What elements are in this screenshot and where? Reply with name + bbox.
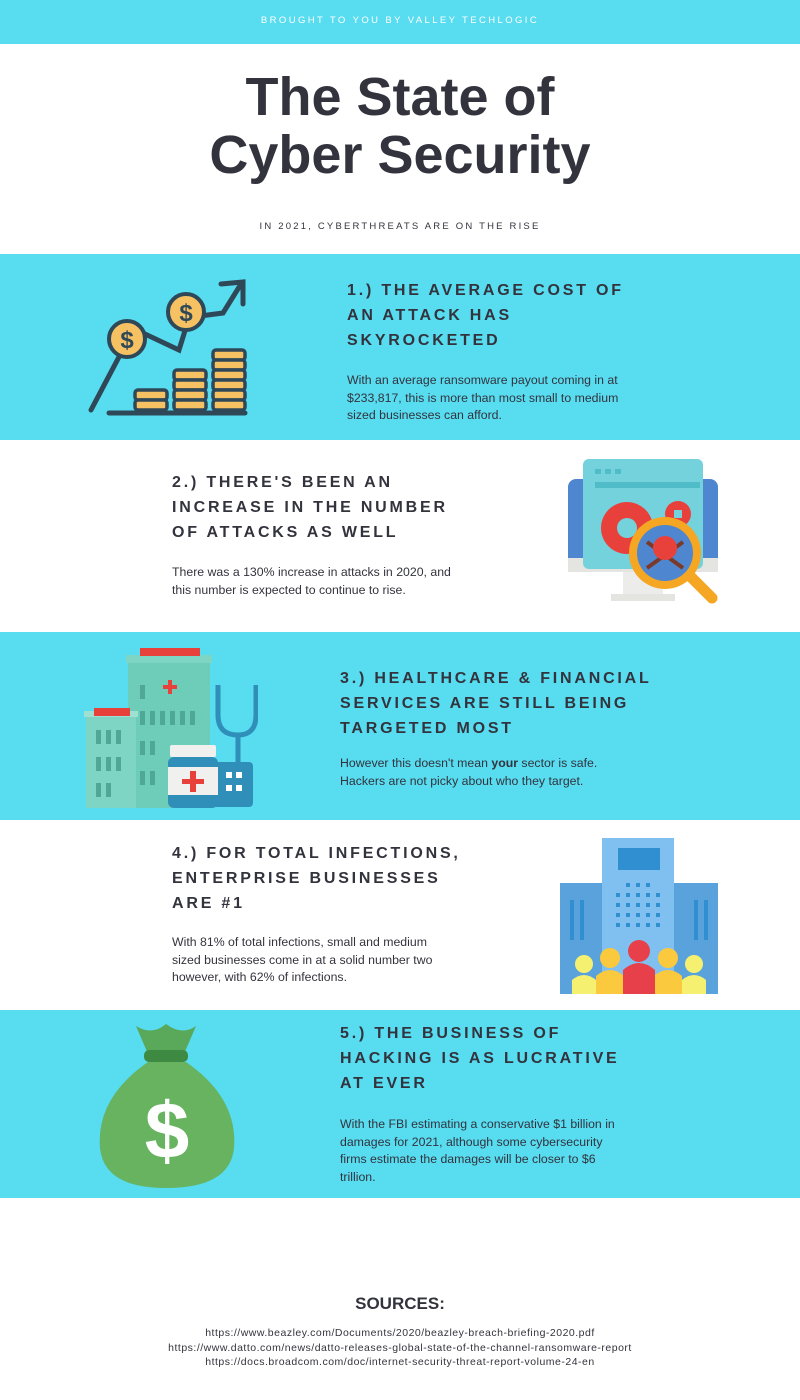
heading 1: AN ATTACK HAS (347, 307, 512, 324)
icon: rising coins chart (88, 279, 248, 416)
body 3: Hackers are not picky about who they target. (340, 774, 583, 788)
body 2: this number is expected to continue to rise. (172, 582, 406, 596)
sources heading: SOURCES: (355, 1294, 445, 1313)
top bar (0, 0, 800, 44)
icon: hospital (84, 648, 258, 808)
heading 5: AT EVER (340, 1075, 428, 1092)
heading 4: ENTERPRISE BUSINESSES (172, 870, 441, 887)
heading 2: 2.) THERE'S BEEN AN (172, 474, 393, 491)
icon: money bag: $ (145, 1086, 189, 1175)
body 5: With the FBI estimating a conservative $1 billion in (340, 1117, 615, 1131)
credit text: BROUGHT TO YOU BY VALLEY TECHLOGIC (261, 15, 539, 26)
heading 4: 4.) FOR TOTAL INFECTIONS, (172, 845, 461, 862)
sources list: https://www.beazley.com/Documents/2020/beazley-breach-briefing-2020.pdf (205, 1327, 595, 1339)
body 2 (172, 565, 451, 596)
panel 2: increase in attacks (172, 459, 718, 604)
title (209, 67, 591, 185)
body 4: With 81% of total infections, small and medium (172, 935, 427, 949)
heading 2: INCREASE IN THE NUMBER (172, 499, 448, 516)
body 4: sized businesses come in at a solid number two (172, 952, 432, 966)
sources list: https://docs.broadcom.com/doc/internet-security-threat-report-volume-24-en (205, 1356, 595, 1368)
heading 5 (340, 1025, 620, 1092)
panel 4: total infections (172, 838, 718, 994)
heading 4 (172, 845, 461, 912)
body 3 (340, 756, 597, 788)
body 2: There was a 130% increase in attacks in 2020, and (172, 565, 451, 579)
heading 3 (340, 670, 652, 737)
body 5: trillion. (340, 1170, 376, 1184)
body 3: However this doesn't mean your sector is safe. (340, 756, 597, 770)
panel 5: business of hacking (0, 1010, 800, 1198)
title: Cyber Security (209, 125, 591, 185)
heading 1: 1.) THE AVERAGE COST OF (347, 282, 624, 299)
icon: money bag (100, 1024, 234, 1188)
heading 5: HACKING IS AS LUCRATIVE (340, 1050, 620, 1067)
heading 2 (172, 474, 448, 541)
sources list (168, 1327, 632, 1368)
body 4: however, with 62% of infections. (172, 970, 347, 984)
body 5: firms estimate the damages will be closer to $6 (340, 1152, 596, 1166)
heading 1 (347, 282, 624, 349)
icon: rising coins chart: $ (179, 300, 193, 327)
heading 3: TARGETED MOST (340, 720, 514, 737)
body 1: $233,817, this is more than most small to medium (347, 390, 618, 404)
sources list: https://www.datto.com/news/datto-releases-global-state-of-the-channel-ransomware-report (168, 1342, 632, 1354)
icon: enterprise building with people (560, 838, 718, 994)
body 5 (340, 1117, 615, 1184)
heading 4: ARE #1 (172, 895, 245, 912)
icon: rising coins chart: $ (120, 327, 134, 354)
panel 3: healthcare & financial (0, 632, 800, 820)
heading 2: OF ATTACKS AS WELL (172, 524, 398, 541)
body 1 (347, 373, 618, 422)
heading 3: SERVICES ARE STILL BEING (340, 695, 629, 712)
body 5: damages for 2021, although some cybersecurity (340, 1134, 602, 1148)
title: The State of (245, 67, 555, 127)
subtitle: IN 2021, CYBERTHREATS ARE ON THE RISE (260, 221, 540, 232)
panel 1: average cost (0, 254, 800, 440)
heading 1: SKYROCKETED (347, 332, 500, 349)
body 4 (172, 935, 432, 984)
icon: monitor with malware (568, 459, 718, 604)
body 1: sized businesses can afford. (347, 408, 502, 422)
heading 5: 5.) THE BUSINESS OF (340, 1025, 561, 1042)
heading 3: 3.) HEALTHCARE & FINANCIAL (340, 670, 652, 687)
body 1: With an average ransomware payout coming in at (347, 373, 618, 387)
